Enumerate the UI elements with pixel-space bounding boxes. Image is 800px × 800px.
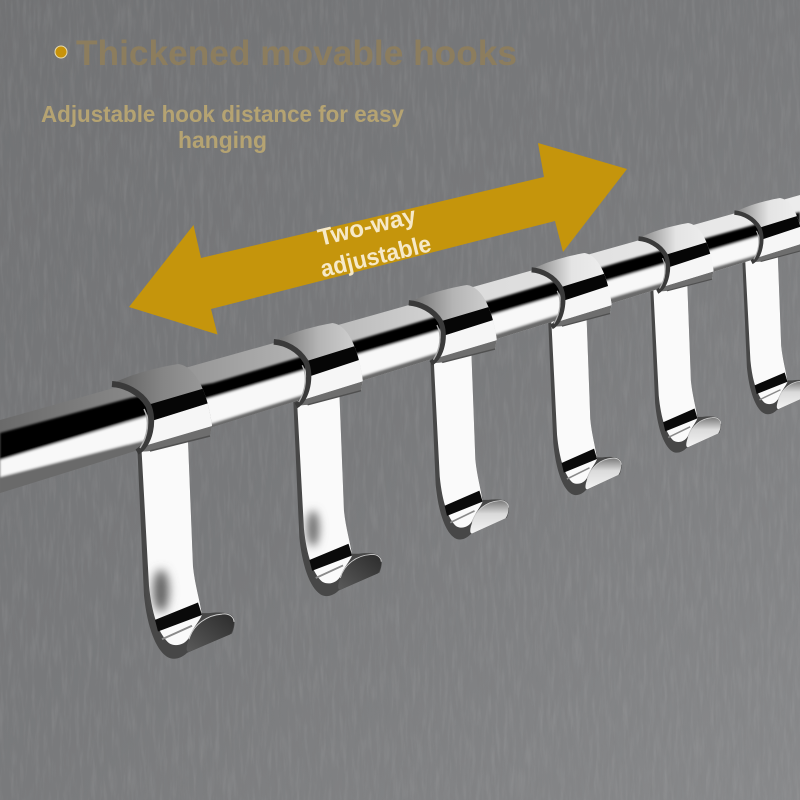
two-way arrow — [129, 143, 627, 334]
subtitle text: hanging — [178, 127, 267, 153]
hook 3 — [430, 350, 509, 539]
collar 6 — [733, 198, 800, 289]
hook 4 — [548, 315, 622, 495]
collar 4 — [530, 253, 612, 358]
subtitle text — [41, 101, 404, 153]
collar 5 — [637, 223, 714, 320]
collar 1 — [110, 364, 212, 489]
chrome rail — [0, 190, 800, 500]
collar 2 — [272, 323, 363, 440]
arrow label — [310, 200, 434, 283]
hooks — [137, 252, 800, 659]
arrow label: adjustable — [318, 230, 434, 283]
hook 5 — [650, 282, 721, 453]
hook 2 — [293, 394, 382, 596]
arrow label: Two-way — [315, 202, 420, 252]
subtitle text: Adjustable hook distance for easy — [41, 101, 404, 127]
sliding collars — [110, 198, 800, 489]
collar 3 — [407, 285, 497, 396]
title bullet dot — [55, 46, 67, 58]
hook 1 — [137, 440, 235, 659]
hook 6 — [742, 252, 800, 414]
title: Thickened movable hooks — [76, 34, 517, 73]
